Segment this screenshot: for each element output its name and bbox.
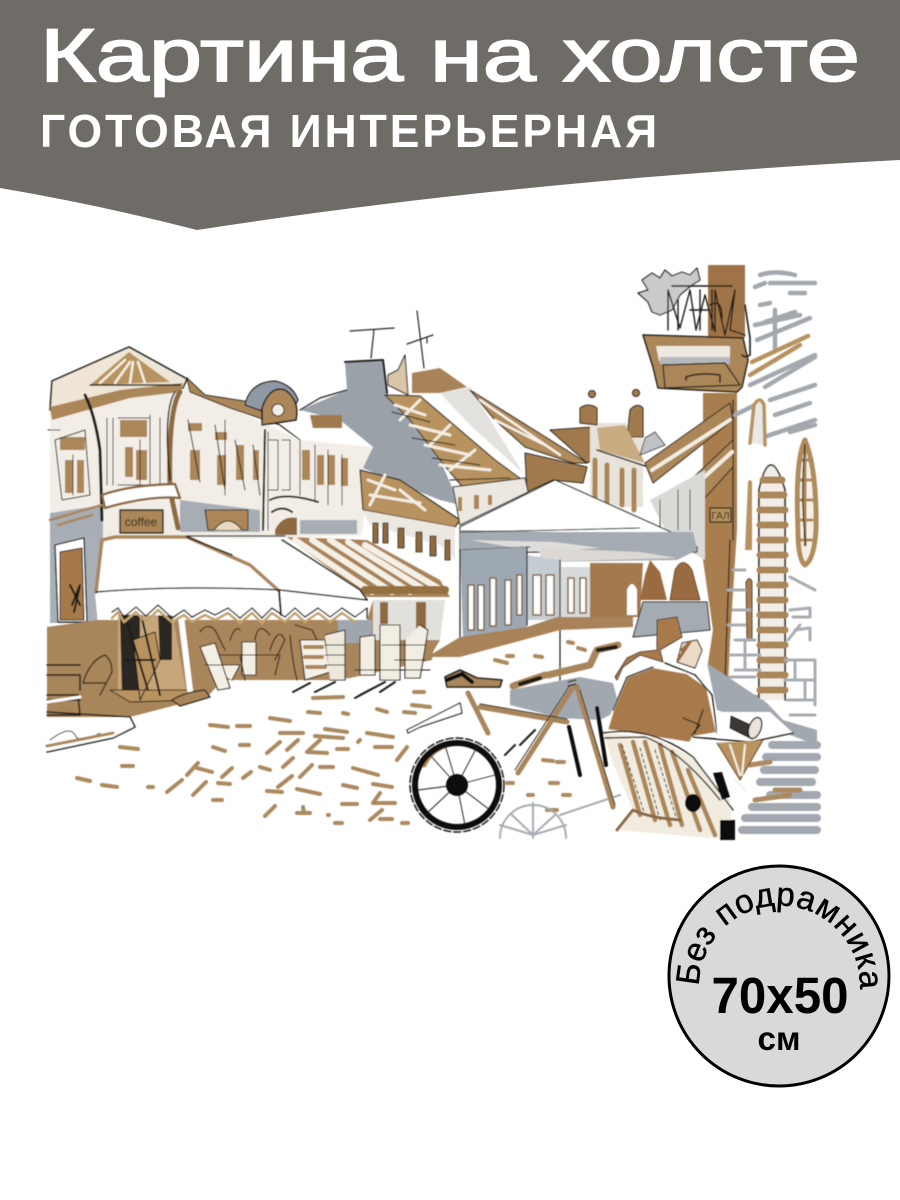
back street buildings and people [427, 547, 710, 690]
badge arc text: Без подрамника [676, 888, 878, 990]
antennas [350, 311, 433, 368]
white market umbrella [460, 480, 697, 562]
coffee sign: coffee [125, 515, 158, 529]
cup [730, 716, 764, 740]
header banner [0, 0, 900, 230]
seated man [607, 617, 717, 743]
cafe table and cup [693, 712, 793, 790]
white awnings [95, 536, 450, 623]
shadow of bicycle and grey ground [500, 663, 817, 838]
right wall with arches and bricks [728, 272, 816, 715]
left cafe wall, door and ground [47, 537, 445, 752]
cobblestones [77, 642, 585, 823]
coffee sign [120, 510, 163, 533]
sign text: ГАЛ [711, 511, 730, 522]
badge size: 70x50 [712, 967, 848, 1024]
grey building and roofs [300, 355, 593, 560]
left buildings [48, 347, 372, 550]
tower and balcony [643, 265, 765, 703]
wicker chair [603, 731, 735, 840]
bicycle [407, 645, 618, 832]
painting: street cafe sketch [47, 265, 817, 840]
subtitle: ГОТОВАЯ ИНТЕРЬЕРНАЯ [40, 105, 660, 157]
rear wheel [410, 738, 504, 832]
handlebar [513, 645, 618, 686]
size badge [668, 864, 890, 1088]
saddle [445, 670, 502, 687]
balcony plant and railing [638, 268, 750, 356]
badge unit: см [758, 1020, 800, 1057]
distant domes and small building [580, 390, 665, 510]
cafe tables and chairs [200, 625, 430, 698]
title: Картина на холсте [40, 13, 860, 97]
